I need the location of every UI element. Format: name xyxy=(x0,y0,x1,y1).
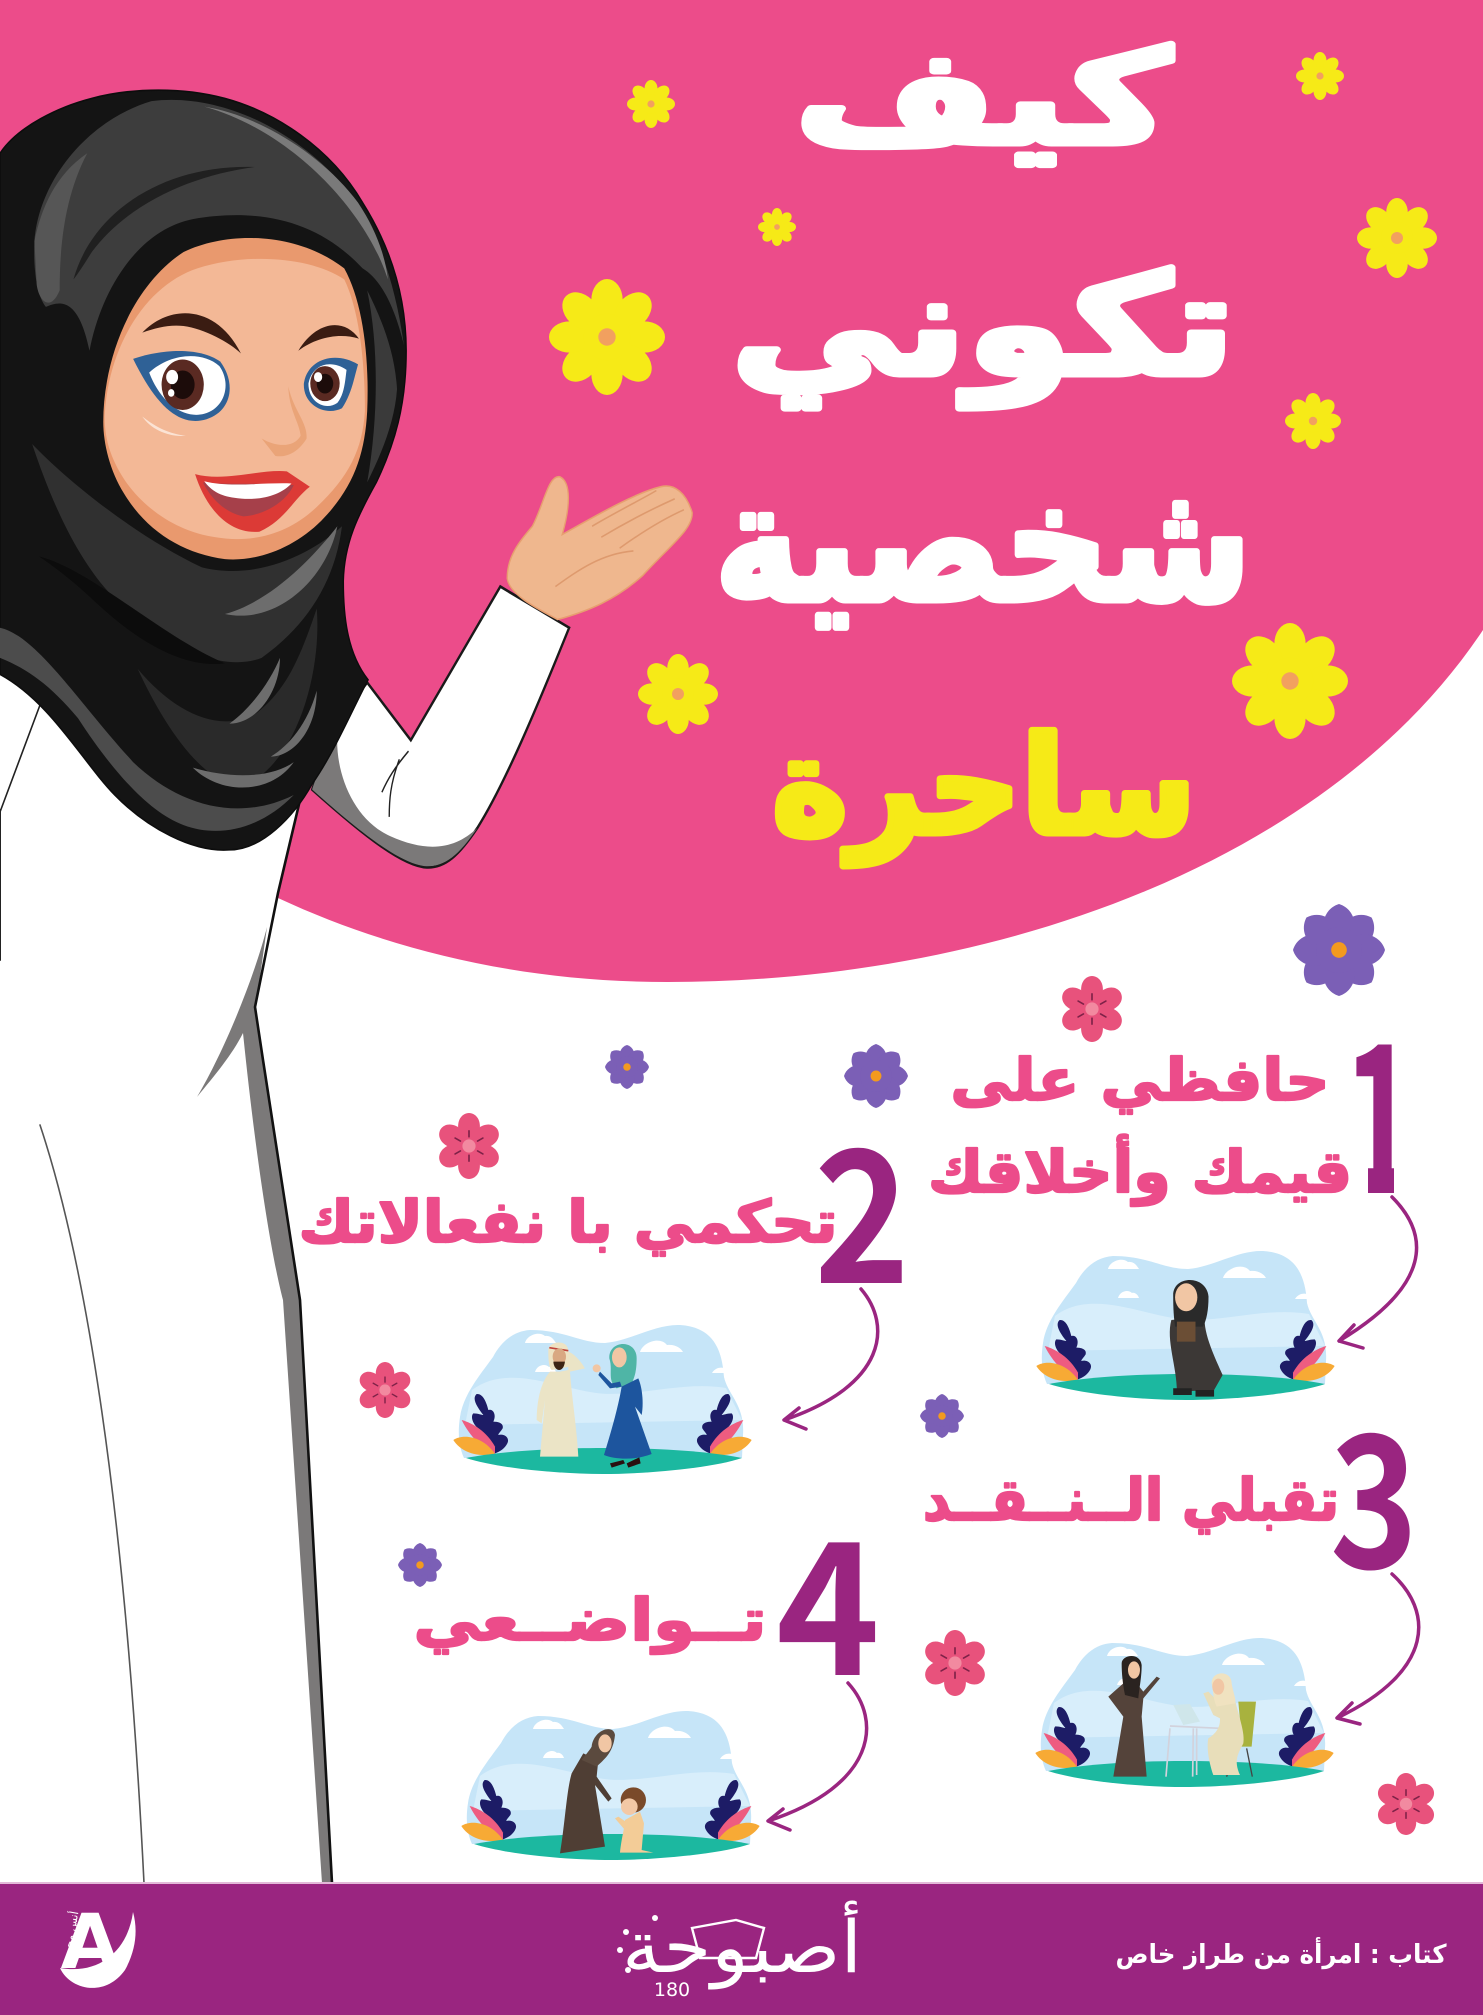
pink flowers xyxy=(356,976,1438,1835)
arrow 4 xyxy=(768,1683,867,1830)
footer logo: Osboha 180: أصبوحة xyxy=(622,1900,862,1990)
step 1 text: حافظي على xyxy=(950,1046,1330,1114)
step 1 xyxy=(928,955,1424,1400)
scene 4: woman with child xyxy=(461,1711,760,1860)
sleeve xyxy=(312,587,569,867)
right eyebrow xyxy=(298,325,359,351)
arrow 3 xyxy=(1337,1574,1419,1724)
step 1 text xyxy=(928,1046,1352,1207)
arrow 2 xyxy=(784,1289,878,1429)
number 1 xyxy=(1330,955,1424,1253)
footer author logo: A xyxy=(61,1897,120,1986)
arrow 1 xyxy=(1339,1197,1417,1348)
step 2 text: تحكمي با نفعالاتك xyxy=(298,1188,838,1256)
number 1: 1 xyxy=(1343,955,1417,1253)
scene 3: women in a meeting xyxy=(1035,1638,1334,1787)
title: كيف xyxy=(795,22,1172,174)
nose xyxy=(262,386,307,456)
mouth xyxy=(195,471,310,532)
right eye xyxy=(304,358,358,411)
hijab xyxy=(0,90,406,850)
title xyxy=(714,22,1252,866)
step 3 xyxy=(923,1355,1419,1787)
purple flowers xyxy=(398,904,1385,1587)
title: ساحرة xyxy=(772,708,1196,866)
dress xyxy=(0,670,332,1883)
step 3 text: تقبلي الــنــقــد xyxy=(923,1466,1339,1534)
hand xyxy=(507,477,692,619)
footer book credit: كتاب : امرأة من طراز خاص xyxy=(1116,1937,1447,1970)
woman character xyxy=(0,90,692,1883)
step 1 text: قيمك وأخلاقك xyxy=(928,1134,1352,1207)
yellow flowers xyxy=(549,52,1437,739)
number 2: 2 xyxy=(814,1070,910,1336)
footer author logo: أنس محمد xyxy=(59,1910,81,1961)
step 4 text: تــواضــعي xyxy=(414,1586,766,1655)
scene 1: woman with book xyxy=(1036,1251,1335,1400)
title: شخصية xyxy=(714,447,1252,639)
left eyebrow xyxy=(142,313,241,353)
number 3: 3 xyxy=(1330,1355,1418,1621)
pink header background xyxy=(0,0,1483,982)
number 4: 4 xyxy=(776,1462,880,1728)
step 2 xyxy=(298,1070,910,1474)
left eye xyxy=(133,351,230,421)
title: تكوني xyxy=(731,245,1235,409)
scene 2: man and woman talking xyxy=(453,1325,752,1474)
footer logo: Osboha 180: 180 xyxy=(654,1979,690,2001)
face xyxy=(103,238,368,559)
step 4 xyxy=(414,1462,880,1860)
footer bar xyxy=(0,1883,1483,2015)
